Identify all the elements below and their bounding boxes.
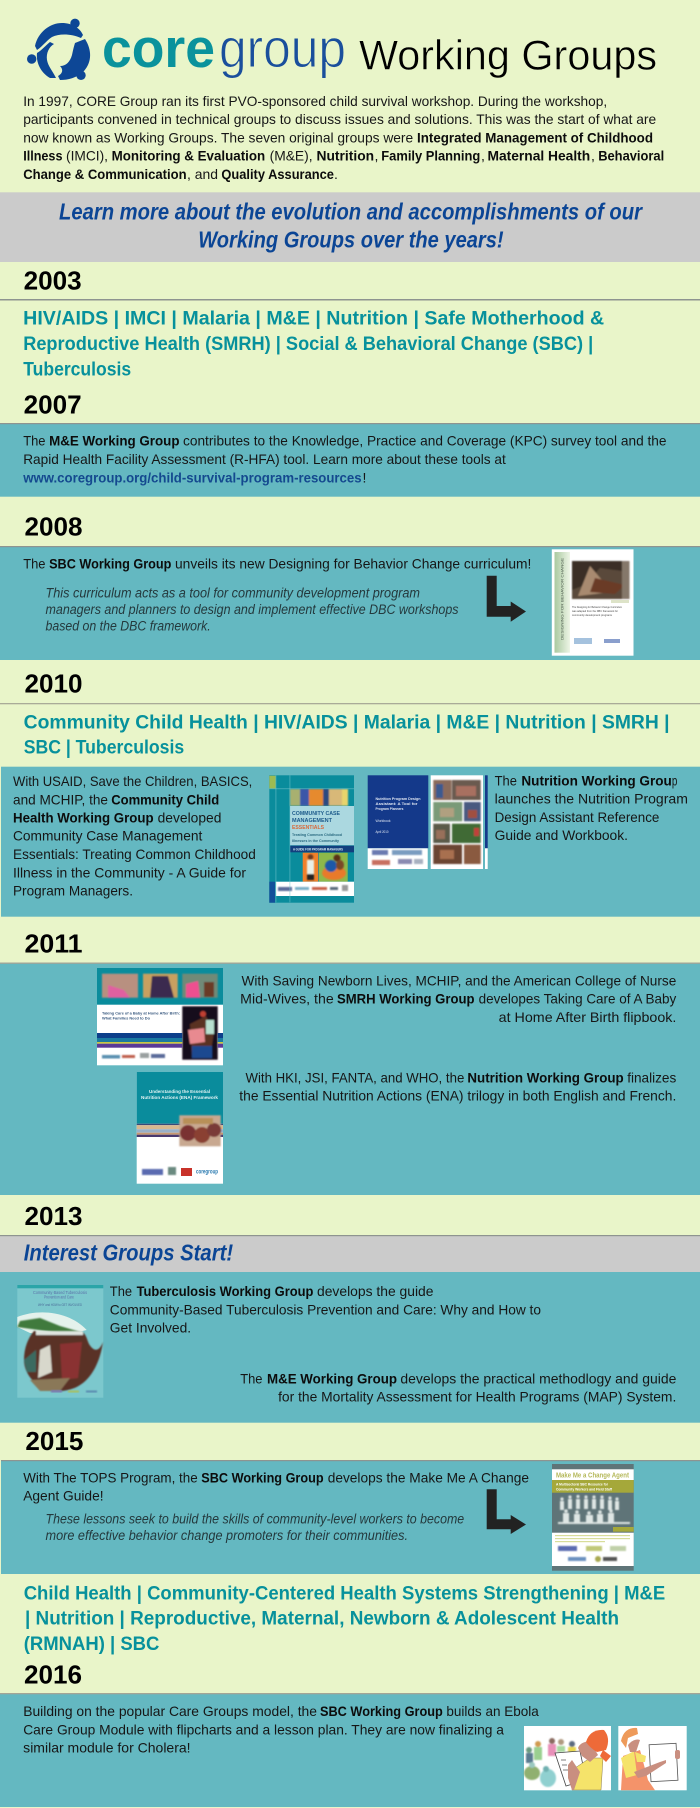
banner: learn more — [0, 192, 700, 262]
book cover: Designing for Behavior Change: community development programs — [572, 613, 612, 617]
text: Community Child Health Working Group — [13, 773, 256, 899]
text: SMRH Working Group: With Saving Newborn Lives, MCHIP, and the American College of Nurse — [242, 972, 676, 988]
text: SMRH Working Group — [240, 972, 676, 1025]
book cover: Community-Based Tuberculosis — [17, 1285, 103, 1398]
book cover: Taking Care of a Baby: Taking Care of a Baby at Home After Birth: — [102, 1010, 180, 1016]
book cover: Make Me a Change Agent: A Multisectoral SBC Resource for — [556, 1482, 608, 1486]
intro paragraph: now known as Working Groups. The seven original groups were — [23, 129, 413, 145]
book cover: Community Case Management Essentials: Treating Common Childhood — [292, 832, 343, 837]
italic description 2008: based on the DBC framework. — [46, 619, 211, 634]
intro paragraph: Illness — [23, 148, 63, 164]
italic description 2008 — [46, 585, 459, 634]
panel: 2016: SBC Working Group — [320, 1703, 443, 1719]
text: SMRH Working Group: developes Taking Care of A Baby — [479, 991, 676, 1007]
text: Nutrition Working Group 2011 — [239, 1069, 676, 1104]
text: Tuberculosis Working Group: The — [110, 1283, 132, 1299]
book cover: Nutrition Program Design Assistant: Program Planners — [376, 806, 404, 811]
text: M&E Working Group 2013: develops the practical methodlogy and guide — [400, 1370, 677, 1386]
intro paragraph: In 1997, CORE Group ran its first PVO-sponsored child survival workshop. During the workshop, — [23, 93, 607, 109]
book cover: Designing for Behavior Change — [552, 549, 634, 656]
book cover: Essential Nutrition Actions: Understanding the Essential — [149, 1089, 210, 1094]
working group list 2015: | Nutrition | Reproductive, Maternal, Newborn & Adolescent Health — [25, 1609, 619, 1630]
text: Nutrition Working Group 2010: launches the Nutrition Program — [495, 791, 688, 807]
intro paragraph: Behavioral — [598, 148, 664, 164]
text: Community Child Health Working Group: developed — [158, 810, 221, 826]
panel: 2015: develops the Make Me A Change — [328, 1469, 529, 1485]
book cover: Community Case Management Essentials — [269, 775, 354, 903]
text: Nutrition Working Group 2011: finalizes — [627, 1069, 676, 1085]
panel: 2015: SBC Working Group — [201, 1469, 324, 1485]
intro paragraph — [23, 93, 664, 182]
intro paragraph: (M&E), — [270, 148, 313, 164]
illustration: health worker with flipchart — [618, 1726, 687, 1790]
working group list 2010: Community Child Health | HIV/AIDS | Malaria | M&E | Nutrition | SMRH | — [24, 712, 670, 733]
intro paragraph: Nutrition — [316, 148, 374, 164]
text: M&E Working Group 2013: M&E Working Group — [267, 1370, 397, 1386]
text: Tuberculosis Working Group: Tuberculosis Working Group — [137, 1283, 313, 1299]
arrow 2008 — [487, 576, 526, 622]
working group list 2003: HIV/AIDS | IMCI | Malaria | M&E | Nutrition | Safe Motherhood & — [23, 309, 604, 330]
intro paragraph: Integrated Management of Childhood — [417, 129, 653, 145]
panel: 2016: similar module for Cholera! — [23, 1740, 191, 1756]
text: Community Child Health Working Group: Illness in the Community - A Guide for — [13, 864, 246, 880]
panel: 2008: unveils its new Designing for Behavior Change curriculum! — [175, 555, 531, 571]
icon: CORE Group circle of people — [27, 19, 90, 80]
text: Community Child Health Working Group: Essentials: Treating Common Childhood — [13, 846, 256, 862]
panel: 2007 — [0, 423, 700, 497]
working group list 2003: Tuberculosis — [23, 359, 131, 380]
intro paragraph: , and — [187, 166, 218, 182]
text: Nutrition Working Group 2010: Guide and Workbook. — [495, 827, 628, 843]
panel: 2013 — [0, 1272, 700, 1423]
book cover: Essential Nutrition Actions — [137, 1072, 223, 1184]
text: Community Child Health Working Group: Health Working Group — [13, 810, 154, 826]
book cover: Community Case Management Essentials: COMMUNITY CASE — [292, 811, 340, 817]
intro paragraph: , — [591, 148, 595, 164]
working group list 2010: SBC | Tuberculosis — [24, 737, 184, 758]
book cover: Community-Based Tuberculosis: Prevention and Care — [44, 1294, 74, 1300]
text: SMRH Working Group: SMRH Working Group — [337, 991, 474, 1007]
italic description 2015 — [46, 1511, 464, 1543]
panel: 2007: Rapid Health Facility Assessment (R-HFA) tool. Learn more about these tools at — [23, 451, 506, 467]
intro paragraph: Family Planning — [381, 148, 480, 164]
intro paragraph: (IMCI), — [66, 148, 108, 164]
text: Tuberculosis Working Group: develops the guide — [317, 1283, 434, 1299]
text: Nutrition Working Group 2010 — [495, 772, 688, 843]
text: Nutrition Working Group 2011: With HKI, JSI, FANTA, and WHO, the — [246, 1069, 464, 1085]
book cover: Community-Based Tuberculosis: Community-Based Tuberculosis — [33, 1290, 88, 1295]
panel: 2011 — [0, 962, 700, 1195]
text: Nutrition Working Group 2010: p — [672, 772, 678, 788]
book cover: Designing for Behavior Change: was adapted from the DBC framework for — [572, 609, 618, 613]
year heading: 2008: 2008 — [24, 511, 82, 541]
panel: 2016 — [0, 1693, 700, 1807]
year heading: 2015: 2015 — [25, 1426, 83, 1456]
panel: 2010 — [1, 767, 700, 917]
text: Community Child Health Working Group: Community Case Management — [13, 828, 202, 844]
arrow 2015 — [487, 1489, 526, 1534]
text: Tuberculosis Working Group — [110, 1283, 541, 1335]
book cover: Make Me a Change Agent: Make Me a Change Agent — [556, 1472, 630, 1480]
panel: 2008 — [0, 546, 700, 660]
panel: 2008: The — [23, 555, 46, 571]
book cover: Nutrition Program Design Assistant: April 2010 — [376, 829, 389, 834]
book cover: Nutrition Program Design Assistant: Assistant: A Tool for — [376, 801, 418, 806]
working group list 2015 — [24, 1583, 665, 1655]
panel: 2007: M&E Working Group — [49, 433, 179, 449]
logo: CORE Group: core — [102, 17, 215, 79]
banner: learn more: Working Groups over the years! — [198, 226, 504, 252]
panel: 2015: Agent Guide! — [23, 1488, 104, 1504]
book cover: Community Case Management Essentials: A GUIDE FOR PROGRAM MANAGERS — [293, 848, 344, 852]
panel: 2007: contributes to the Knowledge, Practice and Coverage (KPC) survey tool and the — [183, 433, 667, 449]
text: Nutrition Working Group 2011: the Essential Nutrition Actions (ENA) trilogy in both English and French. — [239, 1088, 676, 1104]
book cover: Community-Based Tuberculosis: WHY and HOW to GET INVOLVED — [38, 1303, 82, 1307]
intro paragraph: Maternal Health — [488, 148, 590, 164]
italic description 2008: This curriculum acts as a tool for community development program — [46, 585, 420, 600]
book cover: Designing for Behavior Change: DESIGNING FOR BEHAVIOR CHANGE — [560, 558, 564, 640]
book cover: Nutrition Program Design Assistant: Workbook — [376, 818, 390, 823]
intro paragraph: participants convened in technical groups to discuss issues and solutions. This was the start of what are — [23, 111, 656, 127]
book cover: Designing for Behavior Change: The Designing for Behavior Change Curriculum — [572, 605, 622, 609]
text: SMRH Working Group: at Home After Birth flipbook. — [499, 1009, 676, 1025]
text: M&E Working Group 2013: for the Mortality Assessment for Health Programs (MAP) System. — [278, 1389, 676, 1405]
text: Tuberculosis Working Group: Community-Based Tuberculosis Prevention and Care: Why and How to — [110, 1301, 541, 1317]
book cover: Essential Nutrition Actions: coregroup — [196, 1170, 218, 1176]
text: Nutrition Working Group 2011: Nutrition Working Group — [467, 1069, 624, 1085]
year heading: 2010: 2010 — [24, 669, 82, 699]
panel: 2007: www.coregroup.org/child-survival-program-resources — [22, 469, 362, 485]
panel: 2016: Care Group Module with flipcharts and a lesson plan. They are now finalizing a — [23, 1721, 504, 1737]
book cover: Taking Care of a Baby — [97, 968, 223, 1065]
text: M&E Working Group 2013 — [240, 1370, 677, 1405]
text: Nutrition Working Group 2010: Design Assistant Reference — [495, 809, 660, 825]
text: Community Child Health Working Group: and MCHIP, the — [13, 791, 108, 807]
text: Nutrition Working Group 2010: The — [495, 772, 517, 788]
title: Working Groups — [359, 32, 657, 78]
working group list 2003 — [23, 309, 604, 380]
panel: 2007: ! — [362, 469, 366, 485]
working group list 2010 — [24, 712, 670, 758]
italic description 2008: managers and planners to design and implement effective DBC workshops — [46, 602, 459, 617]
text: Community Child Health Working Group: Program Managers. — [13, 883, 133, 899]
panel: 2016: builds an Ebola — [446, 1703, 539, 1719]
intro paragraph: Change & Communication — [23, 166, 187, 182]
text: Community Child Health Working Group: With USAID, Save the Children, BASICS, — [13, 773, 252, 789]
book cover: Essential Nutrition Actions: Nutrition Actions (ENA) Framework — [141, 1095, 219, 1100]
logo: CORE Group — [27, 17, 346, 80]
banner: interest groups: Interest Groups Start! — [24, 1240, 233, 1266]
panel: 2007: The — [23, 433, 46, 449]
book cover: Community Case Management Essentials: ESSENTIALS — [292, 825, 324, 831]
year heading: 2013: 2013 — [24, 1201, 82, 1231]
book cover: Make Me a Change Agent: Community Workers and Field Staff — [556, 1486, 613, 1492]
illustration: health worker with group — [524, 1726, 611, 1790]
working group list 2015: (RMNAH) | SBC — [24, 1634, 160, 1655]
panel: 2008: SBC Working Group — [49, 555, 171, 571]
banner: interest groups — [0, 1235, 700, 1272]
text: M&E Working Group 2013: The — [240, 1370, 263, 1386]
book cover: Make Me a Change Agent — [552, 1464, 634, 1571]
panel: 2016: Building on the popular Care Groups model, the — [23, 1703, 317, 1719]
text: SMRH Working Group: Mid-Wives, the — [240, 991, 334, 1007]
year heading: 2016: 2016 — [24, 1659, 82, 1689]
working group list 2015: Child Health | Community-Centered Health Systems Strengthening | M&E — [24, 1583, 665, 1604]
book cover: Nutrition Program Design Assistant: Nutrition Program Design — [376, 796, 421, 801]
italic description 2015: more effective behavior change promoters for their communities. — [46, 1528, 408, 1543]
year heading: 2011: 2011 — [24, 929, 82, 959]
text: Community Child Health Working Group: Community Child — [111, 791, 219, 807]
panel: 2015 — [1, 1460, 700, 1574]
year heading: 2007: 2007 — [24, 389, 82, 419]
book cover: Community Case Management Essentials: Illnesses in the Community — [292, 838, 340, 843]
working group list 2003: Reproductive Health (SMRH) | Social & Behavioral Change (SBC) | — [23, 334, 593, 355]
italic description 2015: These lessons seek to build the skills of community-level workers to become — [46, 1511, 464, 1526]
text: Tuberculosis Working Group: Get Involved. — [110, 1319, 191, 1335]
intro paragraph: Monitoring & Evaluation — [112, 148, 265, 164]
logo: CORE Group: group — [219, 17, 346, 79]
intro paragraph: , — [481, 148, 485, 164]
year heading: 2003: 2003 — [24, 265, 82, 295]
book cover: Community Case Management Essentials: MANAGEMENT — [292, 818, 333, 824]
intro paragraph: , — [374, 148, 378, 164]
book cover: Taking Care of a Baby: What Families Need to Do — [102, 1016, 151, 1020]
text: Nutrition Working Group 2010: Nutrition Working Grou — [521, 772, 672, 788]
panel: 2015: With The TOPS Program, the — [23, 1469, 198, 1485]
intro paragraph: Quality Assurance — [221, 166, 334, 182]
intro paragraph: . — [334, 166, 338, 182]
book cover: Nutrition Program Design Assistant — [368, 775, 488, 869]
